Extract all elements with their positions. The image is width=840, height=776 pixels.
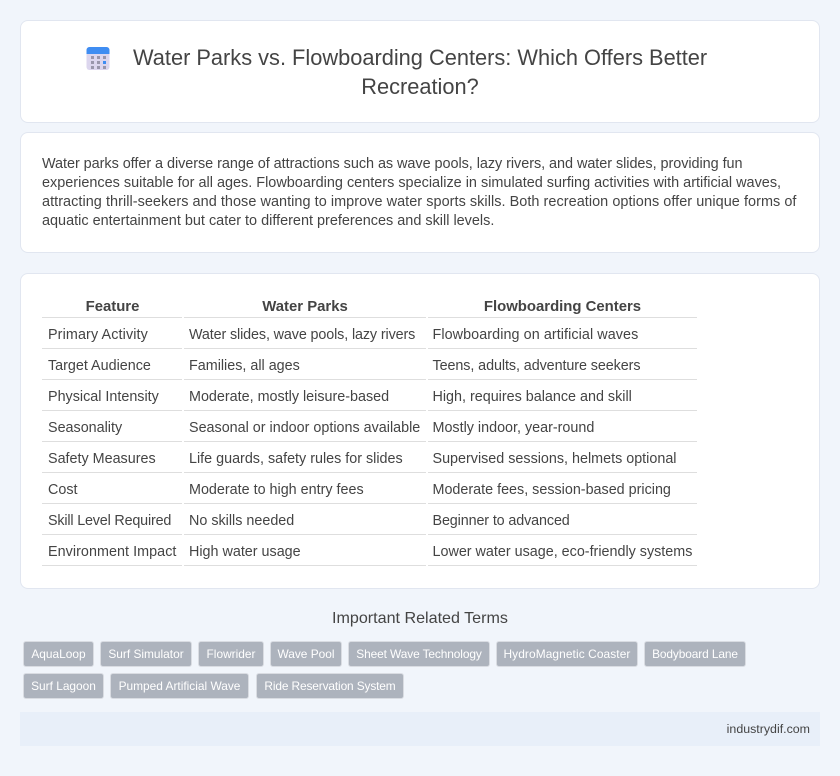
related terms tags: Ride Reservation System [264,679,396,693]
comparison table: Cost [48,482,78,498]
header: Water Parks: Water Parks [262,299,348,315]
comparison table: Supervised sessions, helmets optional [432,451,676,467]
footer source text: industrydif.com [727,722,810,736]
related terms tags: Wave Pool [277,647,335,661]
title: Recreation? [361,74,479,99]
comparison table: High, requires balance and skill [432,389,632,405]
comparison table: Moderate to high entry fees [189,482,364,498]
related terms tags: AquaLoop [31,647,86,661]
intro paragraph: experiences suitable for all ages. Flowboarding centers specialize in simulated surfing activities with artificial waves, [42,175,781,191]
comparison table: High water usage [189,544,301,560]
comparison table: Lower water usage, eco-friendly systems [432,544,692,560]
comparison table: Moderate, mostly leisure-based [189,389,389,405]
comparison table: Teens, adults, adventure seekers [432,358,640,374]
comparison table: Moderate fees, session-based pricing [432,482,671,498]
title [133,45,707,99]
comparison table: Safety Measures [48,451,156,467]
intro paragraph: aquatic entertainment but cater to different preferences and skill levels. [42,213,494,229]
comparison table: Mostly indoor, year-round [432,420,594,436]
panel: comparison table card [20,273,820,589]
title: Water Parks vs. Flowboarding Centers: Which Offers Better [133,45,707,70]
comparison table: Environment Impact [48,544,176,560]
related terms tags: HydroMagnetic Coaster [503,647,630,661]
related terms tags: Bodyboard Lane [652,647,738,661]
panel: title card [20,20,820,123]
comparison table: Seasonal or indoor options available [189,420,420,436]
related terms tags: Surf Lagoon [31,679,96,693]
intro paragraph [42,156,796,229]
comparison table: Target Audience [48,358,151,374]
comparison table: Seasonality [48,420,122,436]
related terms tags [23,641,746,699]
footer bar [20,712,820,746]
comparison table: No skills needed [189,513,294,529]
header: Feature: Feature [86,299,139,315]
related terms tags: Flowrider [207,647,255,661]
comparison table: Physical Intensity [48,389,159,405]
icon: calendar [86,47,110,70]
comparison table: Water slides, wave pools, lazy rivers [189,327,415,343]
comparison table: Flowboarding on artificial waves [432,327,638,343]
related terms tags: Surf Simulator [108,647,184,661]
heading: related terms: Important Related Terms [332,609,508,627]
comparison table: Families, all ages [189,358,300,374]
comparison table: Life guards, safety rules for slides [189,451,403,467]
intro paragraph: Water parks offer a diverse range of attractions such as wave pools, lazy rivers, and water slides, providing fun [42,156,743,172]
panel: intro text card [20,132,820,253]
related terms tags: Sheet Wave Technology [356,647,482,661]
comparison table: Skill Level Required [48,513,171,529]
related terms tags: Pumped Artificial Wave [119,679,240,693]
comparison table [42,299,697,566]
intro paragraph: attracting thrill-seekers and those wanting to improve water sports skills. Both recreation options offer unique forms of [42,194,796,210]
header: Flowboarding Centers: Flowboarding Centers [484,299,641,315]
comparison table: Primary Activity [48,327,148,343]
comparison table: Beginner to advanced [432,513,570,529]
